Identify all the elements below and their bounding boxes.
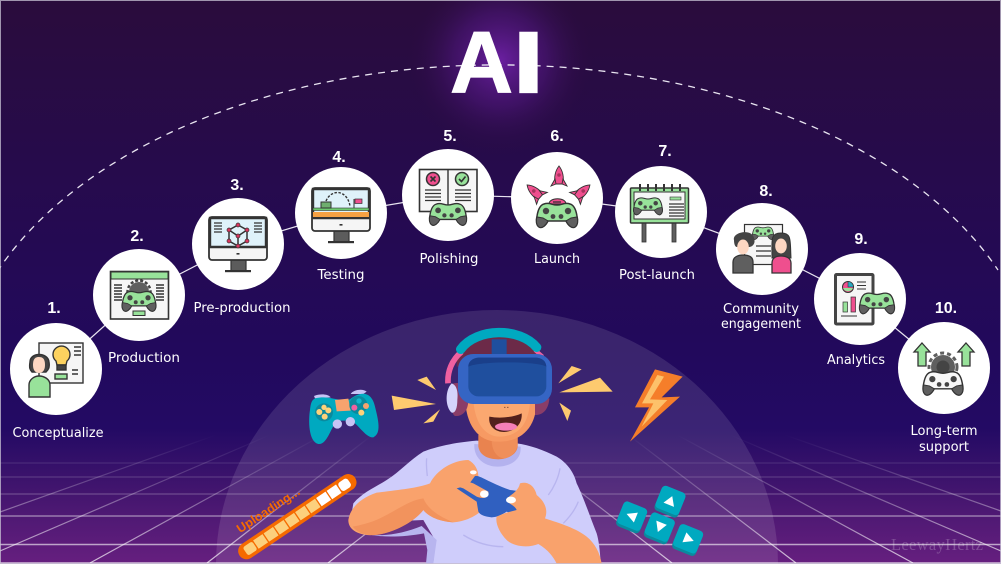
collar	[474, 444, 521, 467]
central illustration: VR gamer	[234, 331, 704, 564]
step 5 number: 5.	[443, 128, 457, 145]
neck	[478, 433, 518, 459]
step 10: long-term support	[898, 300, 990, 455]
step 7 circle	[615, 166, 707, 258]
right arm and hand	[496, 483, 602, 564]
dashed arc	[0, 65, 998, 272]
left arm shading	[353, 498, 453, 535]
step 8: community engagement	[716, 183, 808, 332]
VR headset	[458, 354, 552, 404]
neck highlight	[492, 433, 518, 458]
burst spikes	[392, 366, 613, 423]
face highlight	[473, 398, 530, 437]
shirt wrinkles	[426, 458, 578, 547]
icon: checklist book and gamepad	[420, 169, 477, 225]
step 4 circle	[295, 167, 387, 259]
nose dots	[504, 406, 508, 409]
step 8 circle	[716, 203, 808, 295]
icon: two people with checklist	[733, 224, 791, 273]
watermark: LeewayHertz	[891, 535, 983, 554]
title: AI: A	[450, 14, 513, 112]
step 8 label	[721, 302, 801, 332]
step 3 number: 3.	[230, 177, 244, 194]
step 4 label: Testing	[316, 268, 364, 283]
step 8 label: Community	[723, 302, 799, 317]
step 6 circle	[511, 152, 603, 244]
teal gamepad	[309, 390, 379, 444]
game controller	[457, 476, 530, 517]
step 2 number: 2.	[130, 228, 144, 245]
hair	[457, 331, 540, 367]
icon: analytics tablet and gamepad	[836, 274, 895, 324]
connector line between stages	[56, 195, 944, 369]
face	[465, 398, 537, 442]
left arm and hand	[348, 460, 488, 535]
background dome	[216, 310, 778, 564]
right ear cup	[535, 398, 549, 415]
step 1: conceptualize	[10, 300, 104, 441]
step 9: analytics	[814, 231, 906, 368]
step 4: testing	[295, 149, 387, 283]
step 4 number: 4.	[332, 149, 346, 166]
step 9 number: 9.	[854, 231, 868, 248]
icon: monitor with 3D cube	[209, 217, 267, 272]
step 6: launch	[511, 128, 603, 267]
step 10 number: 10.	[935, 300, 957, 317]
perspective floor grid	[0, 398, 1001, 563]
upload progress bar	[235, 471, 360, 563]
step 9 label: Analytics	[827, 353, 885, 368]
top strap	[492, 339, 507, 356]
finger nails	[470, 470, 516, 503]
step 3 label: Pre-production	[194, 301, 290, 316]
icon: game window with gear	[110, 272, 168, 319]
lightning bolt	[630, 369, 683, 442]
headband teal	[461, 333, 537, 349]
headphone band pink	[448, 352, 462, 383]
shirt shadow	[352, 526, 437, 564]
step 10 label	[910, 424, 978, 455]
left ear cup	[450, 383, 468, 416]
step 7 label: Post-launch	[619, 268, 695, 283]
step 1 label: Conceptualize	[12, 426, 104, 441]
icon: rockets over gamepad	[522, 166, 595, 228]
step 5: polishing	[402, 128, 494, 267]
icon: billboard with gamepad	[630, 184, 688, 242]
step 8 label: engagement	[721, 317, 801, 332]
step 10 circle	[898, 322, 990, 414]
step 10 label: Long-term	[910, 424, 978, 439]
icon: person with idea	[29, 343, 83, 397]
icon: gear, gamepad and up arrows	[914, 343, 974, 395]
shirt	[350, 441, 601, 564]
step 7 number: 7.	[658, 143, 672, 160]
step 6 label: Launch	[534, 252, 580, 267]
step 1 circle	[10, 323, 102, 415]
uploading text: Uploading...	[234, 485, 303, 536]
glow behind title	[405, 0, 595, 155]
icon: monitor with platform game	[312, 188, 370, 243]
title: AI	[450, 13, 545, 112]
step 10 label: support	[919, 440, 969, 455]
headphone band right	[535, 350, 543, 357]
tongue	[495, 423, 517, 431]
step 2: production	[93, 228, 185, 366]
step 7: post-launch	[615, 143, 707, 283]
step 6 number: 6.	[550, 128, 564, 145]
step 3: pre-production	[192, 177, 290, 316]
title: AI: I	[512, 13, 545, 111]
mouth	[489, 413, 522, 432]
step 2 circle	[93, 249, 185, 341]
step 8 number: 8.	[759, 183, 773, 200]
step 2 label: Production	[108, 351, 180, 366]
step 5 label: Polishing	[420, 252, 478, 267]
left index finger	[450, 476, 488, 498]
step 5 circle	[402, 149, 494, 241]
arrow keys	[615, 485, 704, 557]
step 3 circle	[192, 198, 284, 290]
step 1 number: 1.	[47, 300, 61, 317]
step 9 circle	[814, 253, 906, 345]
ear pad	[447, 383, 458, 413]
